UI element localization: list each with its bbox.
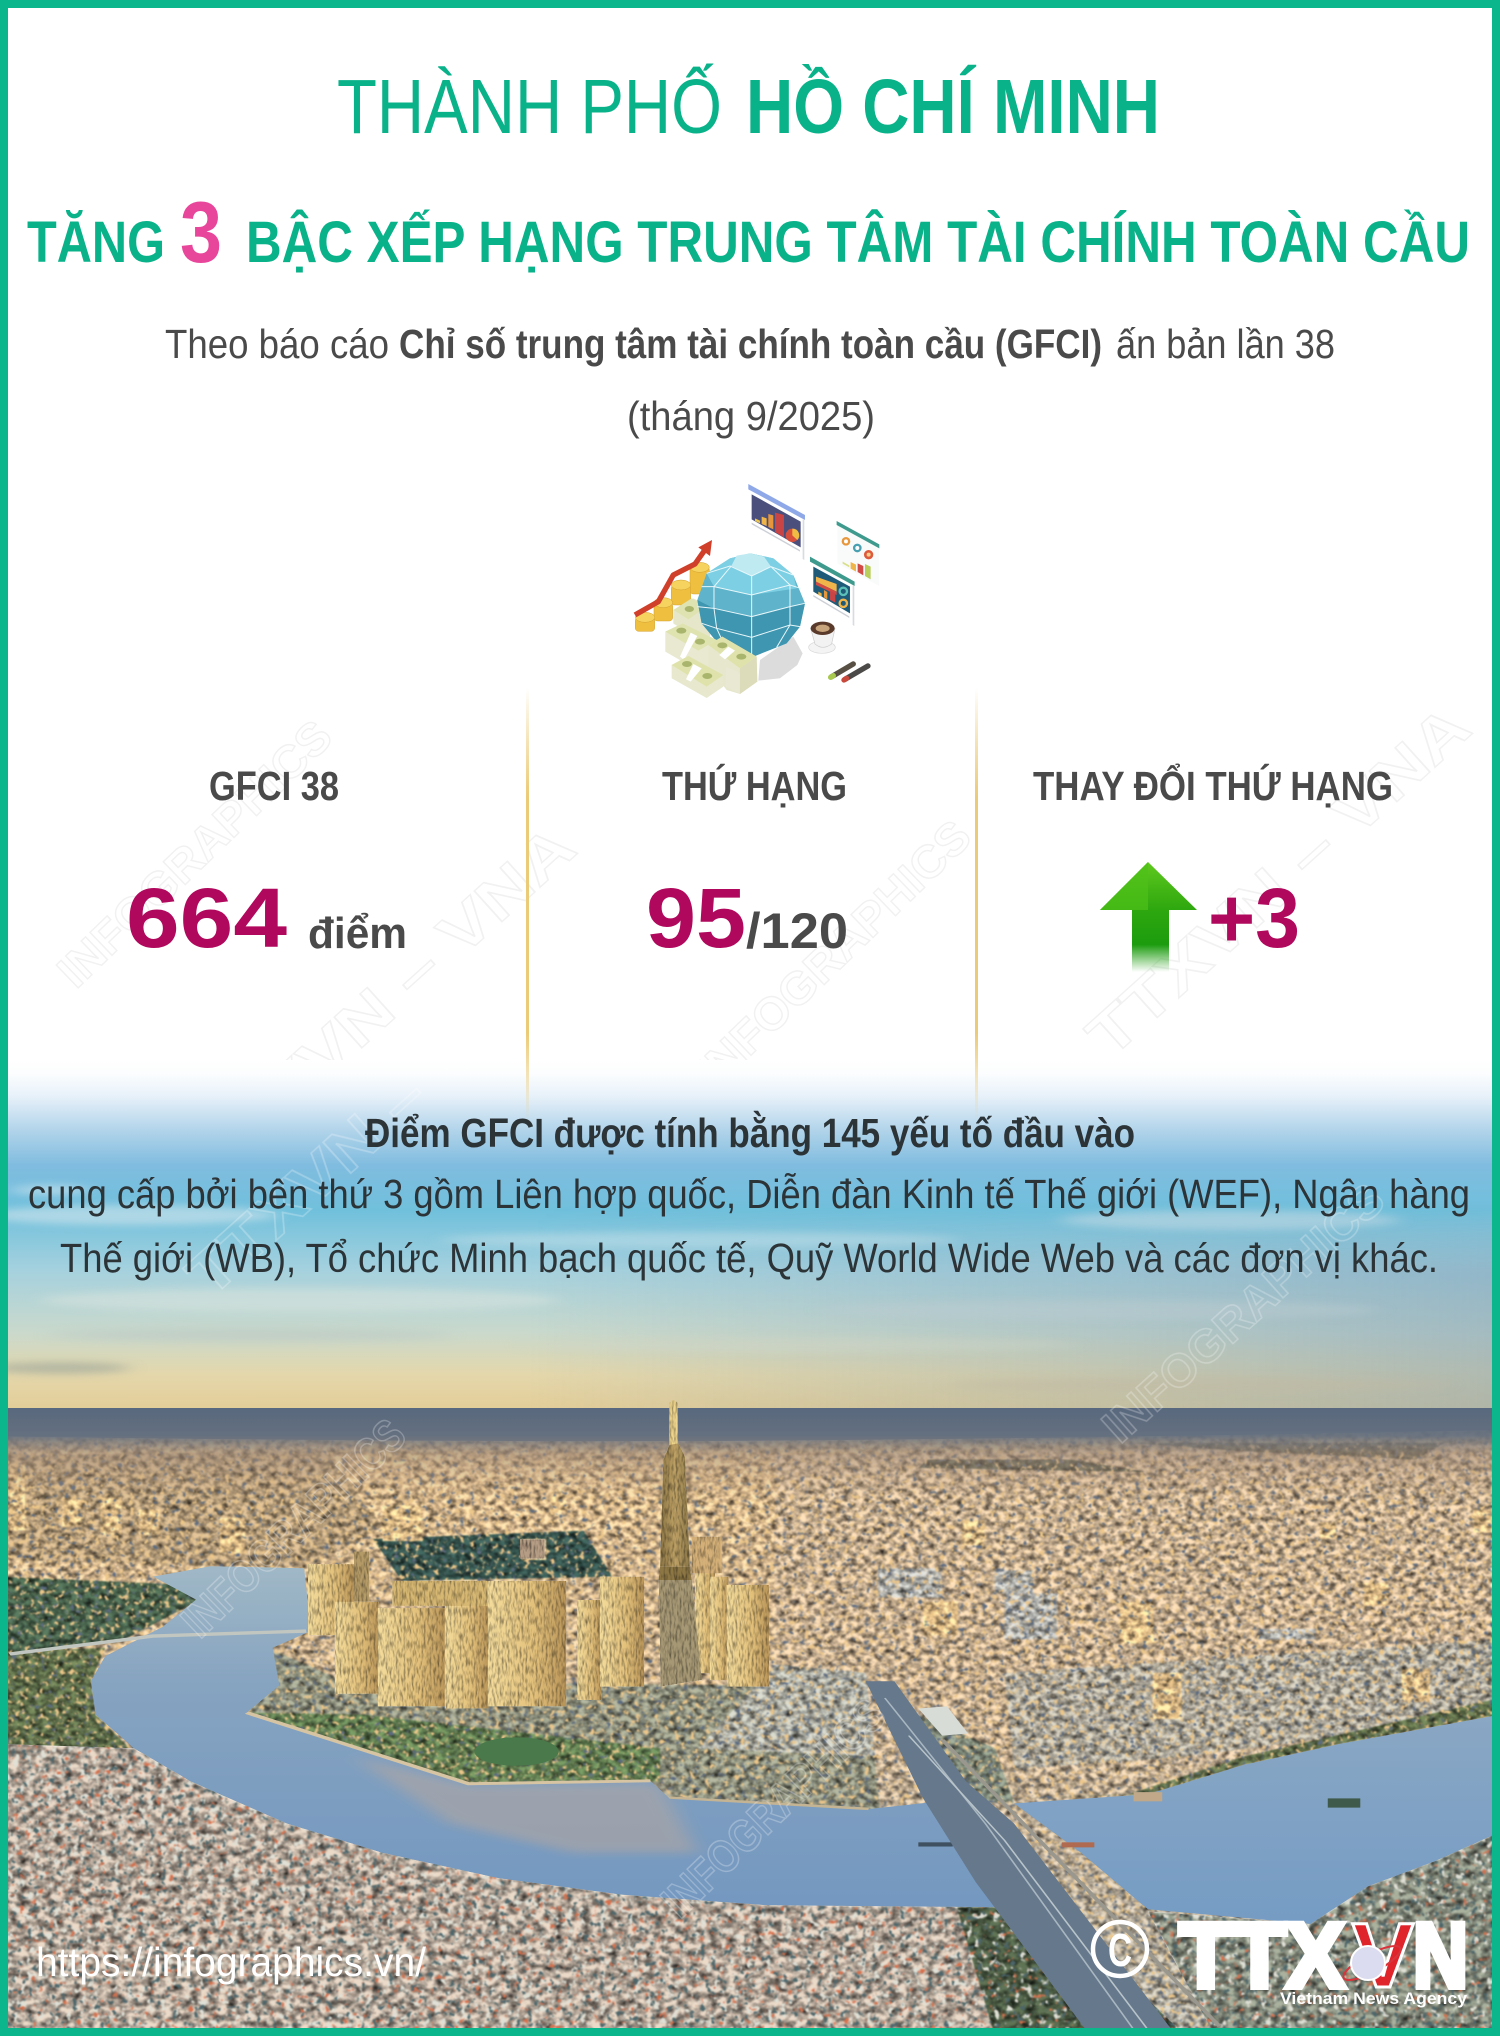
logo: TTXVN: Vietnam News Agency <box>1280 1989 1468 2008</box>
centre dark vegetation <box>957 1907 1186 2036</box>
report source text: (tháng 9/2025) <box>627 393 875 439</box>
marker pens <box>831 664 868 680</box>
stat: rank: 95 <box>646 871 746 965</box>
city texture layer <box>0 1430 1500 2036</box>
icon: globe and finance illustration <box>635 484 879 698</box>
report source text: ấn bản lần 38 <box>1116 321 1335 367</box>
red trend arrow <box>635 540 712 615</box>
river reflection <box>354 1757 698 1853</box>
stack front <box>672 656 723 698</box>
dark park behind towers <box>373 1531 612 1581</box>
photo watermarks: INFOGRAPHICS <box>651 1688 896 1927</box>
left bank greenery <box>0 1577 196 1652</box>
photo watermarks: INFOGRAPHICS <box>171 1408 416 1647</box>
report source text <box>165 321 1335 439</box>
dashboard window 3 <box>810 557 855 626</box>
copyright symbol <box>1093 1922 1147 1976</box>
sky <box>8 1060 1492 1410</box>
park lawn <box>474 1737 559 1766</box>
icon: green up arrow <box>1100 862 1197 972</box>
subtitle <box>27 185 1470 281</box>
description text block: Điểm GFCI được tính bằng 145 yếu tố đầu vào <box>365 1110 1135 1156</box>
far right low district <box>775 1458 1492 1596</box>
title: HỒ CHÍ MINH <box>746 64 1160 150</box>
photo watermarks: INFOGRAPHICS <box>1092 1173 1394 1452</box>
watermarks on white area <box>47 692 1483 1190</box>
city districts <box>0 1430 1500 2036</box>
faceted globe <box>697 553 805 657</box>
residential banks texture layer <box>0 1744 1500 2036</box>
money stacks behind <box>673 598 710 637</box>
distant tall block <box>520 1539 545 1559</box>
copyright symbol: C <box>1108 1924 1132 1976</box>
stat: rank <box>646 763 848 965</box>
right shore greenery <box>1055 1700 1492 1798</box>
money stacks front <box>665 623 757 698</box>
embankment <box>247 1713 650 1784</box>
stat: rank: THỨ HẠNG <box>662 763 847 809</box>
stat: GFCI score: điểm <box>308 909 407 958</box>
airport dark strip <box>1129 1443 1444 1459</box>
scattered buildings <box>10 1443 1492 1719</box>
logo: TTXVN: V <box>1352 1905 1414 2007</box>
stat: rank change: +3 <box>1208 871 1300 965</box>
stat: GFCI score: GFCI 38 <box>209 763 339 809</box>
landmark 81 tower <box>659 1399 702 1687</box>
watermarks on white area: INFOGRAPHICS <box>686 810 981 1097</box>
dashboard window 1 <box>748 484 805 560</box>
bottom residential bank <box>8 1744 994 2028</box>
logo: TTXVN: TTX <box>1179 1905 1345 2007</box>
title <box>337 63 1160 150</box>
left skyline district <box>0 1451 383 1568</box>
stack right <box>708 637 757 694</box>
watermarks on white area: INFOGRAPHICS <box>47 710 342 997</box>
clouds <box>0 1185 1450 1392</box>
title: THÀNH PHỐ <box>337 63 722 150</box>
subtitle: 3 <box>180 185 222 281</box>
left bridge <box>10 1631 306 1654</box>
horizon band behind city <box>8 1436 1164 1442</box>
stat: rank: /120 <box>746 903 848 959</box>
coffee cup <box>809 622 835 653</box>
peninsula ground <box>247 1648 880 1811</box>
globe emblem <box>1340 1940 1404 1986</box>
river <box>10 1566 1500 2036</box>
stat: rank change <box>1033 762 1393 972</box>
photo watermarks: TTXVN – VNA <box>174 945 568 1310</box>
dashboard window 2 <box>837 521 879 586</box>
globe shadow <box>758 637 803 681</box>
central towers <box>520 1399 769 1700</box>
coin stacks <box>635 562 709 631</box>
description text block <box>28 1110 1470 1281</box>
report source text: Chỉ số trung tâm tài chính toàn cầu (GFCI) <box>399 321 1102 367</box>
logo: TTXVN: N <box>1413 1905 1468 2007</box>
subtitle: TĂNG <box>27 210 165 275</box>
highway bridge <box>866 1681 1220 2036</box>
stat: rank change: THAY ĐỔI THỨ HẠNG <box>1033 762 1393 809</box>
stat: GFCI score <box>126 763 407 965</box>
vertical gold dividers <box>526 688 978 1120</box>
boats <box>918 1792 1360 1847</box>
logo: TTXVN <box>1179 1905 1468 2008</box>
website url: https://infographics.vn/ <box>36 1939 427 1985</box>
report source text: Theo báo cáo <box>165 321 389 367</box>
apartment towers and landmark 81 <box>308 1399 769 1708</box>
left apartment towers <box>308 1552 566 1708</box>
photo watermarks <box>171 945 1394 1927</box>
watermarks on white area: TTXVN – VNA <box>179 812 588 1190</box>
lower right bank <box>1148 1832 1500 2036</box>
panel: city photograph <box>8 1060 1492 2028</box>
horizon haze <box>8 1430 1492 1493</box>
watermarks on white area: TTXVN – VNA <box>1074 692 1483 1070</box>
stat: GFCI score: 664 <box>126 871 287 965</box>
stack left <box>665 623 717 672</box>
